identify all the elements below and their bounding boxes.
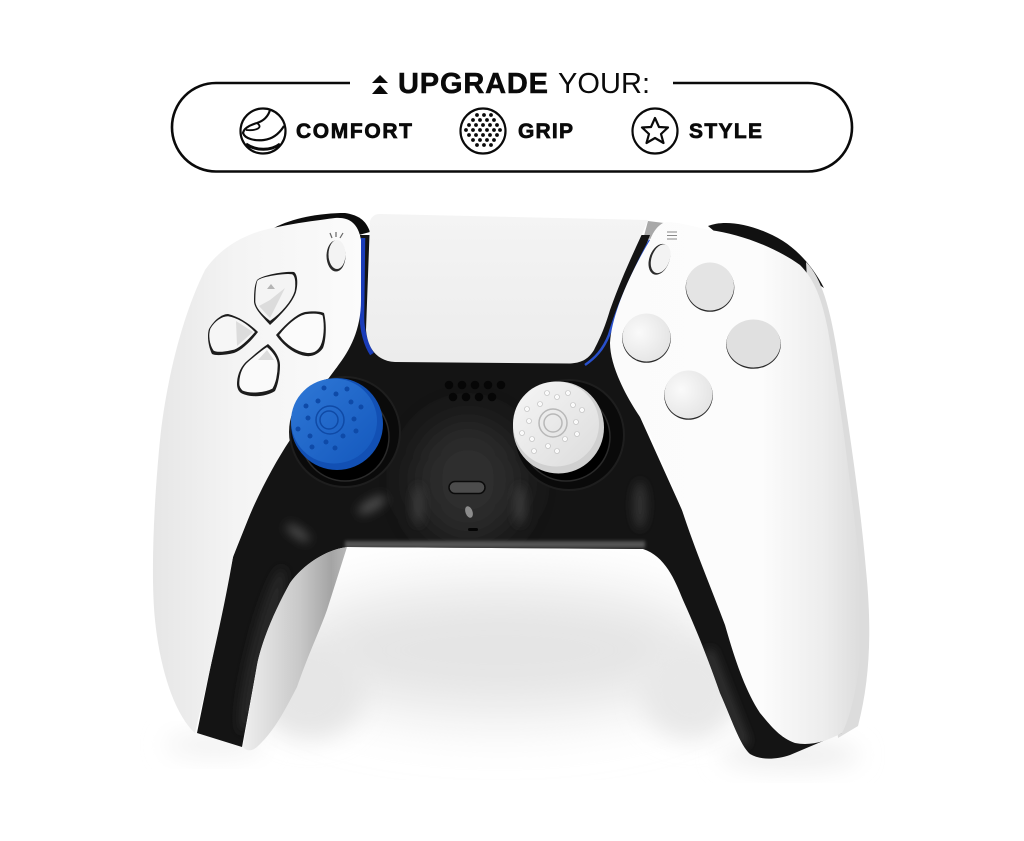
left white shell [153, 218, 361, 733]
options button [644, 232, 677, 278]
blue grip side [291, 378, 383, 470]
grip logo [539, 409, 567, 437]
button bottom [664, 370, 712, 418]
grip logo [316, 406, 344, 434]
right outer side panel [806, 262, 869, 738]
title: UPGRADE [398, 68, 548, 100]
button right [726, 320, 780, 368]
mic icon [464, 505, 478, 531]
label: style: STYLE [689, 120, 762, 143]
stick housing [290, 377, 400, 487]
d-pad shadow crescents [208, 272, 326, 396]
stick housing [514, 380, 624, 490]
button left [622, 314, 670, 362]
d-pad bevel shading [236, 284, 285, 360]
floor shadow [165, 585, 860, 769]
d-pad up [256, 275, 295, 320]
rounded outline frame [172, 83, 852, 172]
left blue light bar [362, 238, 372, 354]
label: grip: GRIP [518, 120, 573, 143]
header: upgrade your badge [172, 68, 852, 172]
d-pad [208, 272, 326, 396]
left inner grip panel [243, 547, 347, 750]
button shadows [622, 263, 781, 420]
d-pad left [210, 317, 254, 351]
touchpad [366, 214, 648, 364]
icon: style star [632, 108, 678, 154]
white grip side [513, 382, 604, 474]
face buttons [622, 262, 781, 420]
infographic canvas [153, 72, 870, 769]
body shading [230, 418, 800, 753]
white grip top [513, 382, 599, 466]
right trigger [708, 223, 824, 288]
d-pad right [280, 314, 323, 352]
blue grip top [291, 378, 377, 464]
icon: comfort [240, 108, 286, 154]
stick shaft [301, 393, 389, 481]
label: comfort: COMFORT [296, 120, 412, 143]
left trigger [274, 213, 370, 240]
d-pad down [240, 348, 277, 392]
right white shell [610, 222, 862, 744]
right blue light bar [585, 240, 650, 365]
title second word: YOUR: [558, 68, 650, 100]
create button [326, 232, 346, 272]
touchpad hinge gap [644, 221, 664, 240]
game controller [153, 213, 869, 759]
speaker grille [445, 381, 505, 401]
grip dots [296, 386, 364, 450]
share pill button [449, 482, 485, 494]
icon: double up arrows [372, 75, 388, 94]
stick shaft [522, 393, 610, 481]
left thumbstick with blue grip [290, 377, 400, 487]
grip dots [520, 390, 584, 454]
icon: grip [460, 108, 506, 154]
right thumbstick with white grip [513, 380, 624, 490]
black body [197, 235, 842, 759]
button top [686, 262, 734, 310]
